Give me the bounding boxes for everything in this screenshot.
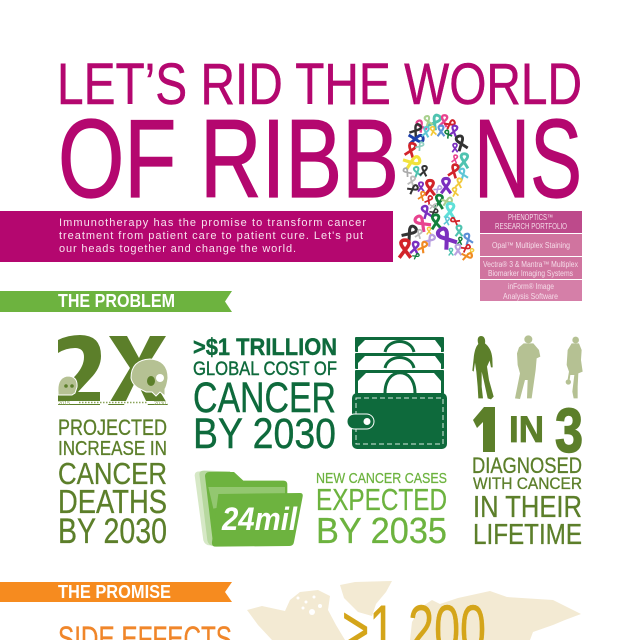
text: 1 in 3: 3 <box>555 397 583 466</box>
panel: phenoptics research portfolio <box>480 211 582 301</box>
text: projected increase <box>58 415 167 551</box>
text: new cancer cases: BY 2035 <box>316 510 447 551</box>
text: global cost: BY 2030 <box>193 410 336 458</box>
text: 1 in 3: DIAGNOSED <box>472 453 582 478</box>
icon: 2X with skulls <box>58 335 168 407</box>
text: 1 in 3: IN THEIR <box>473 490 582 524</box>
text: global cost <box>193 334 337 458</box>
icon: folder 24mil <box>195 471 303 547</box>
heading: the promise <box>0 582 232 602</box>
text: 1 in 3: WITH CANCER <box>473 474 582 493</box>
text: 1 in 3 <box>472 397 583 551</box>
icon: folder 24mil: 24mil <box>221 501 298 537</box>
text: global cost: >$1 TRILLION <box>193 334 337 361</box>
panel: phenoptics research portfolio: Biomarker Imaging Systems <box>488 269 573 278</box>
panel: intro band: our heads together and change the world. <box>59 243 296 255</box>
text: projected increase: CANCER <box>58 457 167 491</box>
heading: the promise: THE PROMISE <box>58 582 171 602</box>
panel: intro band: treatment from patient care to patient cure. Let's put <box>59 230 363 242</box>
text: 1 in 3: IN <box>509 409 544 450</box>
title: NS <box>474 97 582 221</box>
heading: the problem <box>0 291 232 312</box>
text: projected increase: PROJECTED <box>58 415 167 440</box>
icon: 2X with skulls: 2030 <box>154 401 166 407</box>
text: new cancer cases: NEW CANCER CASES <box>316 471 447 487</box>
panel: phenoptics research portfolio: PHENOPTICS™ <box>508 213 553 222</box>
panel: phenoptics research portfolio: Analysis Software <box>503 292 558 301</box>
heading: the problem: THE PROBLEM <box>58 291 175 311</box>
text: global cost: GLOBAL COST OF <box>193 359 337 380</box>
text: projected increase: BY 2030 <box>58 512 167 551</box>
text: 1 in 3: LIFETIME <box>473 519 582 551</box>
panel: phenoptics research portfolio: RESEARCH PORTFOLIO <box>495 222 567 231</box>
text: global cost: CANCER <box>193 374 336 422</box>
text: new cancer cases <box>316 471 447 551</box>
panel: phenoptics research portfolio: Opal™ Multiplex Staining <box>492 241 570 250</box>
world map <box>247 581 581 640</box>
panel: intro band <box>0 211 393 262</box>
title: OF RIBB <box>58 97 399 221</box>
text: new cancer cases: EXPECTED <box>316 483 447 517</box>
icon: 2X with skulls: 2015 <box>58 401 70 407</box>
icon: wallet with banknotes <box>347 337 447 449</box>
text: projected increase: DEATHS <box>58 483 167 520</box>
panel: intro band: Immunotherapy has the promise to transform cancer <box>59 217 366 229</box>
panel: phenoptics research portfolio: inForm® Image <box>508 282 554 291</box>
panel: phenoptics research portfolio: Vectra® 3 & Mantra™ Multiplex <box>483 260 578 269</box>
text: projected increase: INCREASE IN <box>58 438 167 460</box>
icon: three people <box>472 335 583 399</box>
icon: ribbon collage <box>399 113 475 260</box>
title <box>57 52 582 221</box>
